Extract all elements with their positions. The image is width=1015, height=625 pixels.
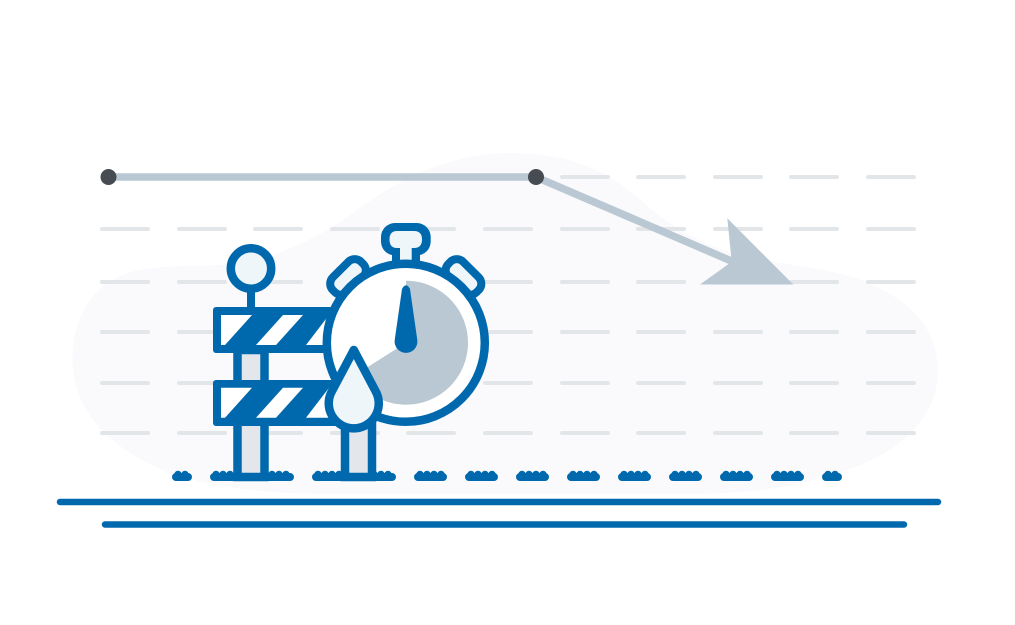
- grid dashes: [102, 177, 914, 433]
- mid point: [528, 169, 544, 185]
- left button: [326, 255, 370, 299]
- roadblock barrier: [213, 248, 372, 477]
- elapsed sector: [354, 281, 468, 405]
- ground grass: [176, 474, 838, 477]
- start point: [100, 169, 116, 185]
- trend line with arrow: [108, 177, 793, 284]
- top knob: [381, 223, 431, 266]
- top bar: [213, 307, 349, 353]
- signal lamp: [231, 248, 271, 310]
- arrow head: [700, 218, 793, 284]
- right post: [345, 415, 372, 477]
- background blob: [72, 153, 938, 494]
- water drop: [329, 350, 379, 428]
- stopwatch: [326, 223, 485, 422]
- right button: [442, 255, 485, 299]
- dial: [327, 264, 485, 422]
- bottom bar: [213, 380, 349, 426]
- left post: [238, 350, 264, 477]
- hand: [395, 285, 417, 353]
- ground lines: [60, 502, 938, 524]
